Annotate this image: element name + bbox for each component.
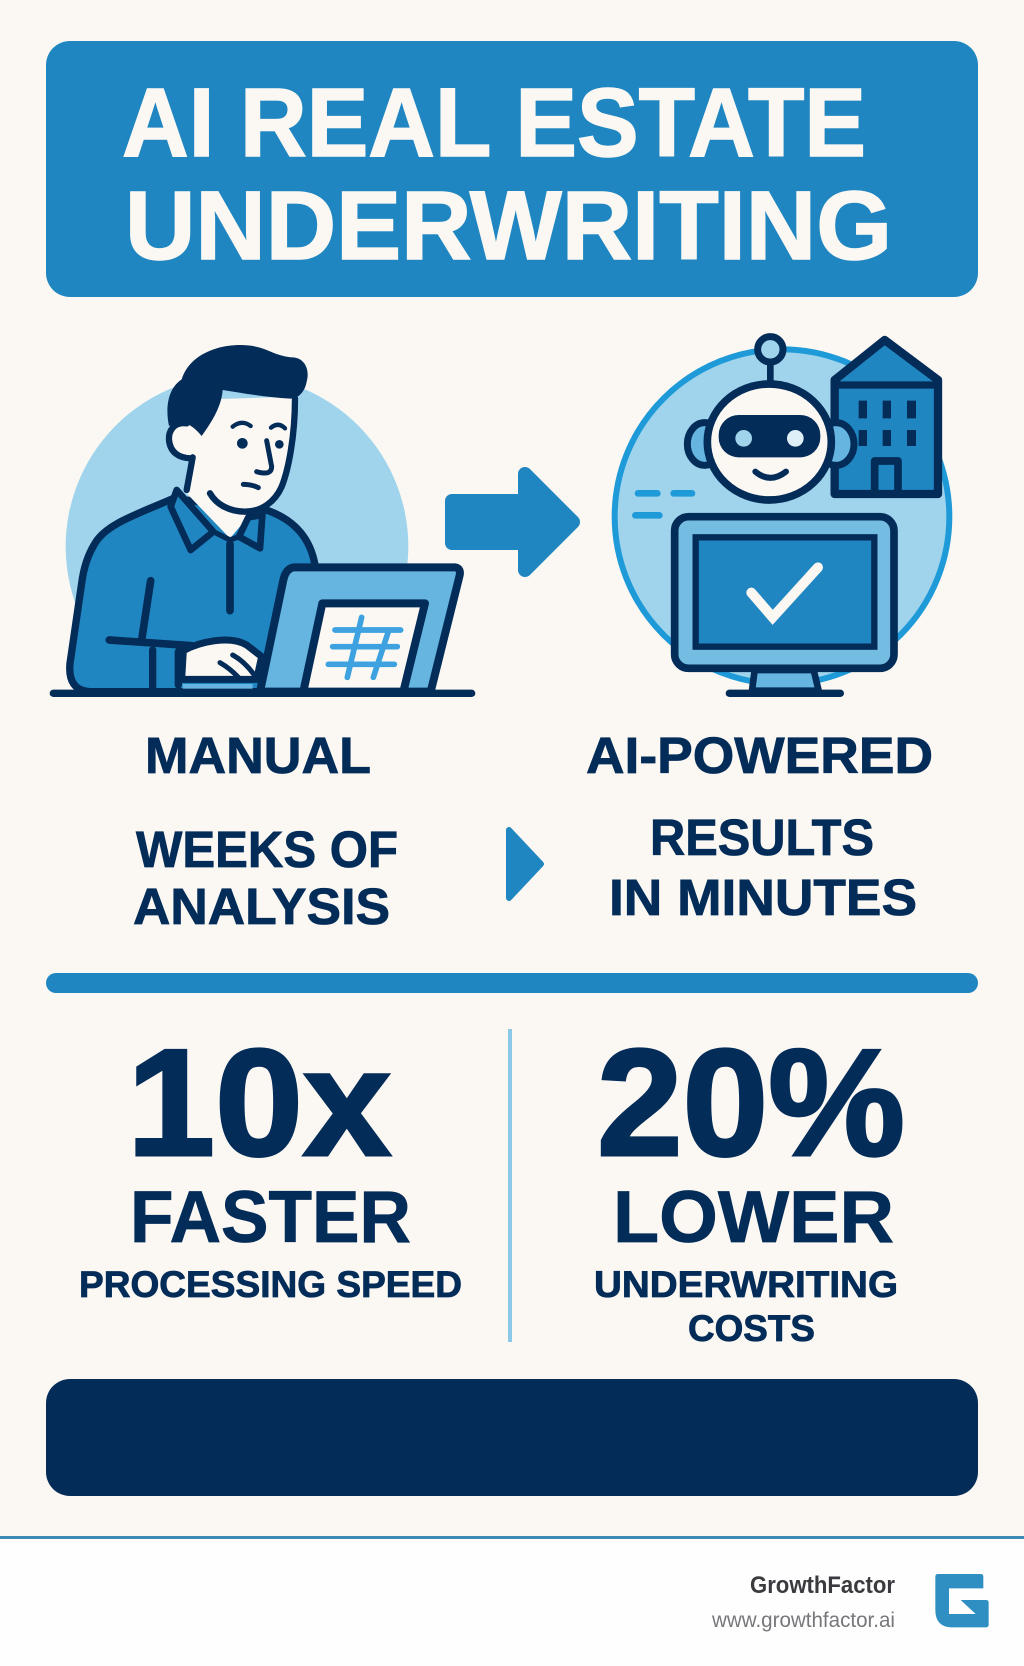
eyes and brows	[233, 423, 285, 488]
stat: 20% lower	[594, 1018, 908, 1349]
speed dashes	[635, 493, 692, 515]
body	[70, 498, 315, 692]
illustration: AI robot with building and monitor	[615, 337, 949, 693]
label: manual: MANUAL	[145, 727, 371, 784]
divider bar	[46, 973, 978, 993]
vertical divider	[508, 1029, 512, 1342]
monitor	[675, 517, 894, 693]
text: weeks of analysis: WEEKS OF	[136, 821, 398, 878]
title text: AI REAL ESTATE	[122, 68, 866, 177]
label: AI-powered: AI-POWERED	[586, 727, 933, 784]
footer	[0, 1536, 1024, 1666]
brand name: GrowthFactor	[750, 1572, 895, 1599]
text: results in minutes: RESULTS	[650, 809, 874, 866]
shirt placket and arm lines	[109, 544, 230, 690]
stat number: 20%	[597, 1018, 905, 1188]
check mark	[751, 567, 818, 617]
hand	[182, 640, 262, 689]
robot	[687, 337, 854, 500]
title banner	[46, 41, 978, 297]
laptop	[260, 567, 460, 692]
ear	[169, 423, 192, 458]
icon: logo	[935, 1574, 989, 1627]
arrow: manual to AI	[452, 474, 573, 570]
stat description: PROCESSING SPEED	[79, 1264, 462, 1305]
stat description: COSTS	[688, 1308, 815, 1349]
title text: UNDERWRITING	[125, 171, 892, 280]
stat: 10x faster	[79, 1018, 462, 1305]
text: weeks of analysis: ANALYSIS	[133, 878, 390, 935]
stat label: LOWER	[613, 1177, 894, 1258]
desk	[53, 682, 472, 704]
hair	[167, 345, 308, 436]
face and neck	[180, 397, 294, 538]
stat number: 10x	[127, 1018, 391, 1188]
illustration: manual analyst at laptop	[53, 345, 472, 693]
small arrow	[509, 830, 541, 898]
building	[835, 340, 938, 494]
background circle	[615, 349, 949, 684]
text: results in minutes: IN MINUTES	[609, 869, 917, 926]
spreadsheet grid	[328, 617, 401, 677]
website: www.growthfactor.ai	[711, 1609, 895, 1632]
stat label: FASTER	[130, 1177, 411, 1258]
collar	[171, 490, 262, 550]
stat description: UNDERWRITING	[594, 1264, 898, 1305]
dark banner	[46, 1379, 978, 1496]
